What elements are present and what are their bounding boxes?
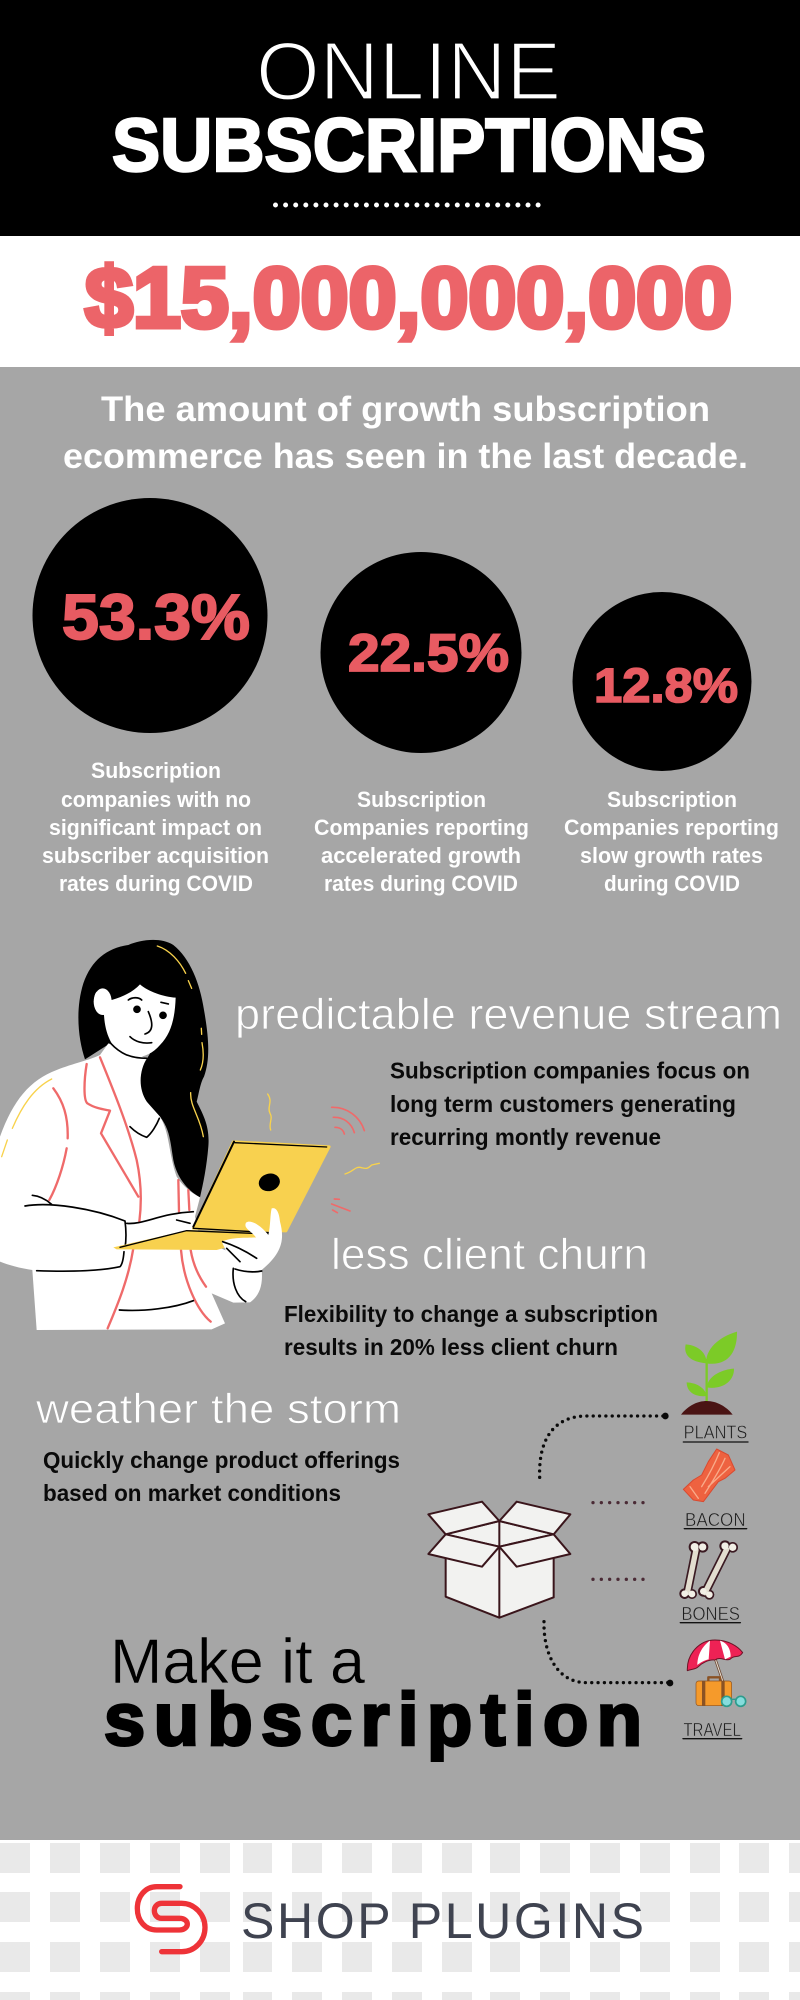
footer panel bbox=[0, 1840, 800, 2000]
stat: 22.5%: Companies reporting bbox=[314, 815, 529, 840]
stat: 12.8%: during COVID bbox=[604, 871, 740, 896]
dotted divider bbox=[276, 202, 540, 208]
title line: SUBSCRIPTIONS: SUBSCRIPTIONS bbox=[112, 103, 706, 187]
icon: plant bbox=[681, 1332, 737, 1415]
arrow: to bacon bbox=[593, 1498, 643, 1508]
heading: weather the storm: weather the storm bbox=[35, 1385, 401, 1432]
subtitle text bbox=[63, 390, 748, 476]
heading: less client churn: less client churn bbox=[331, 1230, 648, 1279]
hand bbox=[222, 1208, 282, 1270]
text block: weather the storm: based on market conditions bbox=[43, 1480, 341, 1506]
text block: less client churn: results in 20% less client churn bbox=[284, 1334, 618, 1360]
label: bones: BONES bbox=[681, 1603, 740, 1624]
stat: 53.3%: significant impact on bbox=[49, 815, 262, 840]
hand details bbox=[223, 1242, 262, 1272]
text block: predictable revenue: long term customers generating bbox=[390, 1091, 736, 1117]
text block: weather the storm bbox=[43, 1447, 400, 1506]
icon: bones bbox=[679, 1540, 738, 1600]
icon: Shop Plugins logo bbox=[137, 1887, 205, 1952]
stat: 22.5%: 22.5% bbox=[348, 624, 509, 683]
icon: open box bbox=[428, 1502, 570, 1618]
stat: 53.3%: rates during COVID bbox=[59, 871, 253, 896]
brand name: SHOP PLUGINS bbox=[241, 1893, 644, 1949]
arrow: to bones bbox=[593, 1574, 643, 1584]
label: bacon: BACON bbox=[685, 1509, 746, 1530]
stat: 22.5%: accelerated growth bbox=[321, 843, 521, 868]
stat: 12.8%: slow growth rates bbox=[580, 843, 763, 868]
label: plants: PLANTS bbox=[684, 1421, 747, 1442]
call to action: Make it a subscription: Make it a bbox=[110, 1627, 366, 1697]
stat: 53.3%: Subscription bbox=[91, 758, 221, 783]
icon: travel bbox=[687, 1640, 746, 1706]
text block: weather the storm: Quickly change product offerings bbox=[43, 1447, 400, 1473]
sleeve outlines bbox=[25, 1195, 246, 1310]
stat: 22.5% bbox=[314, 552, 529, 896]
subtitle text: The amount of growth subscription bbox=[101, 390, 710, 429]
stat: 12.8% bbox=[564, 592, 779, 896]
stat: 22.5%: Subscription bbox=[357, 787, 486, 812]
stat: 12.8%: Companies reporting bbox=[564, 815, 779, 840]
face bbox=[94, 984, 176, 1057]
title line: ONLINE: ONLINE bbox=[256, 24, 561, 118]
header band with title bbox=[0, 0, 800, 236]
stat: 53.3%: 53.3% bbox=[62, 581, 250, 653]
stat: 53.3%: subscriber acquisition bbox=[42, 843, 269, 868]
panel: headline figure bbox=[0, 236, 800, 367]
illustration: woman with laptop bbox=[0, 940, 379, 1330]
call to action: Make it a subscription: subscription bbox=[104, 1678, 642, 1761]
stat: 53.3%: companies with no bbox=[61, 787, 251, 812]
big number: $15,000,000,000 bbox=[85, 251, 732, 346]
stat: 12.8%: Subscription bbox=[607, 787, 737, 812]
stat: 22.5%: rates during COVID bbox=[324, 871, 518, 896]
label: travel: TRAVEL bbox=[683, 1719, 741, 1740]
heading: predictable revenue stream: predictable revenue stream bbox=[235, 990, 782, 1039]
text block: less client churn: Flexibility to change a subscription bbox=[284, 1301, 658, 1327]
jacket red lines bbox=[49, 1057, 211, 1328]
text block: predictable revenue: Subscription companies focus on bbox=[390, 1058, 750, 1084]
body and jacket bbox=[0, 1043, 262, 1330]
arrow: to travel bbox=[544, 1622, 673, 1686]
icon: bacon bbox=[683, 1449, 735, 1502]
stat: 12.8%: 12.8% bbox=[594, 660, 738, 713]
subtitle text: ecommerce has seen in the last decade. bbox=[63, 437, 748, 476]
face details bbox=[111, 998, 168, 1137]
red signal marks bbox=[332, 1107, 364, 1213]
text block: predictable revenue: recurring montly revenue bbox=[390, 1124, 661, 1150]
arrow: to plants bbox=[540, 1413, 669, 1477]
text block: less client churn bbox=[284, 1301, 658, 1360]
yellow highlights bbox=[2, 946, 379, 1174]
stat: 53.3% bbox=[32, 498, 269, 896]
hair bbox=[78, 940, 209, 1197]
diagram: box to products bbox=[428, 1332, 748, 1740]
ear bbox=[94, 988, 112, 1015]
call to action: Make it a subscription bbox=[104, 1627, 642, 1761]
text block: predictable revenue bbox=[390, 1058, 750, 1150]
laptop bbox=[113, 1142, 329, 1250]
